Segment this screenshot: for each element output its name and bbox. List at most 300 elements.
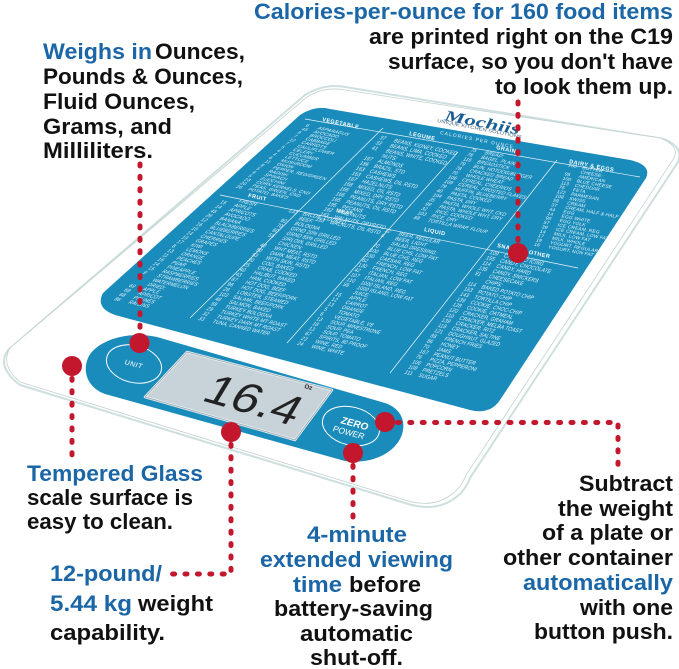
column: grain: CRACKED BREAD [467,169,515,182]
column: vegetable: SPINACH [262,173,289,182]
column: fruit: CANTALOUPE [203,230,241,242]
text: subtract: automatically [523,570,673,595]
column: liquid: 12 [383,228,392,235]
column: dairy and eggs: MILK, WHOLE [551,236,586,247]
column: fruit: WATERMELON [150,278,190,291]
column: legume: 163 [354,166,366,173]
column: meat: HALIBUT, BAKED [251,270,296,284]
column: legume: 163 [350,171,362,178]
column: liquid: WINE, RED [313,339,344,350]
column: fruit: 9 [136,275,144,280]
column: liquid: 15 [333,292,343,299]
column: liquid: 70 [371,243,381,250]
column: vegetable: 23 [242,178,252,183]
column: grain: 99 [423,202,433,208]
column: vegetable: 7 [283,142,290,146]
column: legume: 195 [326,202,338,209]
column: fruit: RAISINS [126,300,151,309]
column: dairy and eggs: 19 [535,238,543,244]
column: liquid: BLUE CHS, REG [381,251,424,265]
column: snacks and other: 86 [425,339,434,345]
text: weight capability: 12-pound/ [50,561,163,586]
column: snacks and other: POTATO CHIP [476,290,513,303]
column: grain: 103 [415,211,428,218]
column: meat: 43 [258,243,268,249]
column: grain: BREAD: [483,151,505,159]
column: liquid: LIQUID [424,227,446,237]
column: fruit: 19 [179,235,190,241]
column: fruit: 45 [208,209,218,215]
column: liquid: 1000 ISLAND, REG [359,281,407,296]
line: zero button [375,412,618,465]
column: fruit: RASPBERRIES [160,269,200,282]
column: vegetable: 6 [250,170,258,175]
column: liquid [295,227,457,362]
column: meat: TUNA, CANNED WATER [210,319,271,337]
column: meat: BOLOGNA [292,221,321,232]
brand logo: Mochiis [442,108,521,138]
button: unit [102,339,166,389]
column: fruit: BLUEBERRIES [208,225,248,238]
column: fruit: 13 [165,249,175,254]
text: weighs in: Fluid Ounces, [43,89,195,114]
column: meat: 55 [266,233,276,239]
text: weight capability: weight [137,591,214,616]
text: subtract [503,471,674,644]
column: fruit: 15 [146,266,156,272]
column: meat: 90 [278,218,288,225]
column: vegetable: 5 [246,174,254,179]
text: subtract: other container [503,545,673,570]
brand logo: UNIQUE KITCHEN SOLUTIONS [437,118,522,139]
column: vegetable: 4 [271,152,278,157]
column: meat: 30 [246,258,255,264]
column: vegetable: CELERY [291,148,316,156]
column: legume: MIXED, OIL RSTD [356,184,402,198]
column: legume: 186 [358,161,370,168]
column: legume: 162 [322,207,334,214]
column: dairy and eggs: MILK, LOW FAT [553,231,592,243]
column: legume: BEANS, LIMA, COOKED [388,144,448,161]
column: vegetable: 6 [267,156,274,161]
column: fruit: 14 [150,262,161,268]
line: calorie table [508,102,528,263]
column: snacks and other: CRACKER, GRAHAM [461,311,514,327]
control pill [86,335,403,462]
column: liquid: 110 [345,277,357,284]
column: fruit: 11 [160,253,170,259]
column: legume: 165 [330,197,342,204]
column: liquid: 100 [367,248,380,255]
line: units [130,164,150,353]
column: snacks and other: SUGAR [417,373,438,382]
text: weighs in: Pounds & Ounces, [43,64,243,89]
column: liquid: BEER, REGULAR [397,232,441,246]
text: weighs in: Ounces, [155,39,245,64]
column: fruit: 26 [203,213,214,219]
text: tempered glass: scale surface is [27,485,193,510]
column: snacks and other: PRETZELS [420,368,450,379]
column: legume: ALMONDS [376,159,405,169]
column: snacks and other: PEANUT BUTTER [431,352,477,367]
column: snacks and other: JAMS [435,347,452,355]
column: snacks and other: 114 [466,282,477,289]
text: weighs in: Grams, and [43,114,172,139]
column: dairy and eggs: 16 [533,242,541,249]
column: legume: HAZELNUTS [360,179,394,191]
column: snacks and other: HONEY [439,342,461,351]
column: meat: SALAMI, BEEF/PORK [231,295,285,311]
column: fruit: DRIED: [145,283,167,291]
column: dairy and eggs: 113 [560,181,570,187]
column: snacks and other: CANDY, HARD [494,264,532,277]
column: fruit: APRICOTS [227,208,257,218]
column: vegetable: 11 [262,160,272,165]
lcd display [145,352,332,440]
column: meat: COD, BAKED [260,261,295,273]
column: snacks and other: 88 [429,334,438,340]
text: tempered glass [27,461,203,534]
column: legume: MIXED, DRY RSTD [352,190,400,204]
text: weight capability: 5.44 kg [50,591,132,616]
column: snacks and other: PIZZA, PEPPERONI [428,357,478,373]
text: viewing time: time [293,572,342,597]
column: liquid: FRENCH, LOW FAT [374,261,424,276]
column: liquid: CAESAR, REG [378,256,416,269]
column: dairy and eggs: 122 [556,189,567,196]
text: calories per ounce: to look them up. [495,74,673,99]
column: vegetable: 4 [275,149,282,154]
column: liquid: 5 [322,307,329,313]
column: liquid: FRENCH, REG [370,266,409,279]
column: liquid: 107 [348,273,361,280]
column: meat: SALMON, BAKED [227,300,272,314]
column: dairy and eggs: DAIRY & EGGS [569,159,615,174]
column: vegetable: ASPARAGUS [315,126,351,137]
column: meat: 50 [254,248,264,254]
column: meat: 87 [229,277,239,283]
column: vegetable: CUCUMBER [287,151,320,162]
column: snacks and other: BAKED POTATO CHIP [480,285,535,301]
column: dairy and eggs: CREAM [566,201,586,209]
column: liquid: 150 [364,253,376,260]
line: tempered glass [62,356,82,461]
column: vegetable: 5 [254,167,262,172]
column: dairy and eggs: EGG YOLK [558,218,587,228]
column: fruit: BLACKBERRIES [212,221,256,234]
column: dairy and eggs: CHEDDAR [574,183,601,193]
column: vegetable: 12 [287,138,297,143]
button: zero power: ZERO [339,416,370,433]
column: meat: 96 [225,282,235,288]
column: meat: GRND 20% GRILLED [288,226,342,242]
column: meat: 59 [209,302,219,308]
column: fruit: KIWI [188,243,204,250]
column: vegetable: PEPPER, RED/GREEN [270,166,328,182]
column: meat: TURKEY WHITE MT ROAST [219,310,288,329]
column: vegetable: CAULIFLOWER [295,144,336,156]
column: fruit: 68 [122,288,132,294]
column: grain: RICE, COOKED [433,209,474,221]
column: vegetable: 9 [295,131,303,136]
column: dairy and eggs: 14 [539,229,547,235]
column: meat: GRND 85% GRILLED [284,231,338,247]
column: grain: 78 [465,152,475,158]
column: meat [196,208,370,339]
column: liquid: WINE, WHITE [309,344,346,357]
text: calories per ounce: are printed right on the C19 [369,24,673,49]
text: viewing time: automatic [300,621,413,646]
column: legume: LEGUME [409,131,436,142]
column: liquid: APPLE [347,295,368,304]
column: snacks and other: 139 [454,297,467,304]
column: meat: MEAT [336,208,354,218]
blue calorie panel [101,108,647,411]
column: liquid: 13 [307,326,316,333]
column: vegetable: 26 [234,185,244,190]
column: meat: 103 [217,292,230,299]
column: meat: 33 [196,316,206,323]
column: liquid: CARROT [343,300,369,310]
column: meat: 32 [200,311,210,318]
line: viewing time [343,443,363,518]
text: weight capability [50,561,214,645]
column: vegetable: VEGETABLE [322,117,360,131]
column: liquid: ORANGE [340,305,365,315]
column: meat: DARK MEAT, RSTD [268,251,317,266]
lcd display: Oz [303,383,313,392]
column: legume: 166 [338,187,350,194]
column: meat: 25 [241,262,251,269]
column: dairy and eggs: 17 [537,233,545,240]
column: dairy and eggs: 75 [558,185,566,191]
column: liquid: SOUP, PEA [324,325,355,336]
column: snacks and other: 155 [484,256,496,263]
column: meat: 29 [205,307,214,313]
column: liquid: JUICE: [351,290,371,299]
column: fruit: APRICOT [136,291,163,301]
column: grain: 88 [412,215,421,221]
column: dairy and eggs [533,159,637,260]
column: vegetable [234,117,374,203]
column: snacks and other: 108 [406,365,419,372]
column: fruit: APPLE [232,203,253,212]
column: legume: PINE NUTS [336,210,367,221]
column: snacks and other: 118 [436,323,448,330]
column: vegetable: CABBAGE [303,137,332,147]
column: grain: CEREAL, FROSTED FLAKES [456,182,528,201]
column: liquid: 23 [299,336,309,343]
column: liquid: 1000 ISLAND, LOW FAT [355,285,415,303]
column: legume: 32 [374,141,383,147]
column: meat: SIRLOIN, GRILLED [280,236,329,251]
column: meat: 60 [270,228,280,234]
column: vegetable: ONION [274,162,296,170]
column: grain: PASTA, COOKED [448,191,493,204]
column: fruit: FRESH: [236,199,260,208]
column: liquid: 130 [356,263,369,270]
column: grain: 70 [450,170,459,176]
column: legume: 37 [378,136,387,142]
column: legume: PEANUTS, DRY RSTD [348,195,404,211]
column: dairy and eggs: 200 [567,163,578,170]
column: meat: 133 [287,209,299,215]
column: meat: 43 [233,272,243,279]
column: snacks and other: CAKE, NO ICING [502,253,545,268]
text: subtract: of a plate or [542,520,673,545]
column: meat: TURKEY DARK MT ROAST [214,315,282,334]
text: weight capability: capability. [50,620,165,645]
column: vegetable: 6 [303,124,311,128]
column: fruit: APPLE [140,287,162,295]
text: subtract: Subtract [579,471,674,496]
column: fruit: 8 [170,244,177,249]
column: vegetable: 8 [258,163,266,168]
column: dairy and eggs: PARMESAN [570,192,600,202]
column: fruit: 16 [155,257,166,263]
column: legume: 183 [318,212,330,219]
column: dairy and eggs: 37 [550,203,558,209]
column: fruit: AVOCADO [222,212,252,222]
column: snacks and other: DOUGHNUT, GLAZED [446,331,501,348]
text: subtract: the weight [558,496,674,521]
glass surface [4,86,679,507]
column: snacks and other: 106 [410,360,422,367]
text: tempered glass: Tempered Glass [27,461,203,486]
text: viewing time: before [349,572,421,597]
column: grain: 35 [427,197,437,203]
column: fruit: 14 [213,205,223,210]
column: vegetable: ZUCCHINI [258,177,287,186]
column: snacks and other: 135 [477,266,489,273]
column: snacks and other: 139 [440,318,452,325]
column: snacks and other: COOKIE, OATMEAL [465,305,515,321]
column: dairy and eggs: 95 [563,172,572,178]
column: snacks and other: 121 [432,328,445,336]
column: fruit: PEACHES [174,256,203,266]
column: grain: RICE, DRY [429,214,459,224]
column: liquid: SOUP, MINESTRONE [328,320,382,336]
column: fruit: STRAWBERRIES [155,274,200,287]
column: legume: BRAZIL, STD [372,164,406,176]
column: fruit: LEMONS [184,247,210,257]
column: meat: TURKEY BOLOGNA [223,305,274,320]
column: dairy and eggs: 14 [546,211,554,218]
column: vegetable: 45 [299,127,310,133]
column: grain: GRAIN [496,145,517,155]
column: fruit: CHERRIES [198,234,229,245]
column: snacks and other: 109 [488,250,500,258]
text: weighs in: Weighs in [43,39,152,64]
column: dairy and eggs: EGG [562,209,576,217]
column: meat: BACON, COOKED [301,212,347,226]
column: snacks and other: 110 [443,313,455,320]
column: dairy and eggs: 57 [543,220,551,227]
text: viewing time: battery-saving [274,596,433,621]
column: fruit: FRUIT [248,193,267,203]
column: vegetable: 5 [279,145,286,150]
column: legume: CASHEWS [368,169,397,180]
column: liquid: 62 [360,258,369,264]
button: unit: UNIT [123,359,144,371]
column: fruit: 68 [117,293,127,298]
column: liquid: 24 [295,341,305,348]
text: calories per ounce [254,0,673,99]
text: calories per ounce: surface, so you don't have [388,49,673,74]
line: weight capacity [166,422,241,574]
text: subtract: with one [579,595,673,620]
column: liquid: SOUP, TOMATO [321,330,362,343]
column: fruit: GRAPES [193,239,219,248]
column: snacks and other: POPCORN [424,363,453,374]
column: vegetable: POTATO, BAKED [246,187,290,200]
column: snacks and other: CHEESECAKE [487,274,525,287]
column: legume: 41 [370,146,379,152]
column: liquid: 8 [379,233,386,239]
column: snacks and other: 153 [462,287,474,294]
column: vegetable: LETTUCE [283,155,311,164]
column: fruit: ORANGE [179,252,205,261]
column: snacks and other: FRENCH FRIES [443,337,484,350]
column: fruit: 15 [218,200,228,206]
column: dairy and eggs: 44 [548,207,556,213]
column: fruit: 10 [189,227,199,232]
column: dairy and eggs: 108 [554,194,565,201]
column: fruit: 14 [184,231,194,237]
brand logo [437,108,522,139]
column: snacks and other: 111 [403,370,414,377]
text: viewing time: 4-minute [307,522,407,547]
column: liquid: 59 [341,282,350,289]
column: snacks and other: CANDY, CHOCOLATE [498,259,553,275]
text: weighs in [43,39,245,163]
column: legume: 167 [346,176,358,183]
column: vegetable: PEAS, GREEN, CND [250,184,303,199]
column: fruit: BANANA [217,217,243,226]
column: snacks and other: CRACKER, RITZ [454,321,497,335]
column: meat: 70 [274,223,284,230]
column: grain: 109 [442,179,455,186]
column: snacks and other: CRACKER, MELBA TOAST [457,316,524,335]
column: meat: HAM, COOKED [247,275,287,288]
column: snacks and other: CHIPS: [483,279,504,289]
column: grain: 106 [446,175,458,182]
column: legume: 166 [334,192,346,199]
column: vegetable: CARROTS [299,141,329,150]
column: snacks and other: COOKIE, CHOC-CHIP [468,300,523,317]
column: fruit: PINEAPPLE [164,265,197,276]
column: grain: 79 [457,161,467,167]
column: fruit: 12 [198,218,209,224]
column: legume: WALNUTS, DRYRSTD [332,215,387,231]
column: snacks and other: CRACKER, SALTINE [450,326,502,342]
column: grain: CEREAL, CHEERIOS [460,178,513,193]
button: zero power: POWER [331,424,366,441]
column: fruit [112,193,281,314]
column: dairy and eggs: EGG WHITE [560,214,591,224]
column: fruit: 69 [126,284,137,290]
column: grain: 40 [434,188,444,194]
column: snacks and other: TORTILLA CHIP [472,295,513,309]
column: dairy and eggs: 59 [552,198,560,205]
button: zero power [318,401,384,451]
column: snacks and other: 167 [417,349,430,356]
panel dividers [190,119,640,373]
column: dairy and eggs: SWISS [568,196,586,204]
text: subtract: button push. [534,619,673,644]
column: liquid: BEER, LIGHT [393,236,429,249]
column: dairy and eggs: ICE CREAM, REG [557,223,601,236]
